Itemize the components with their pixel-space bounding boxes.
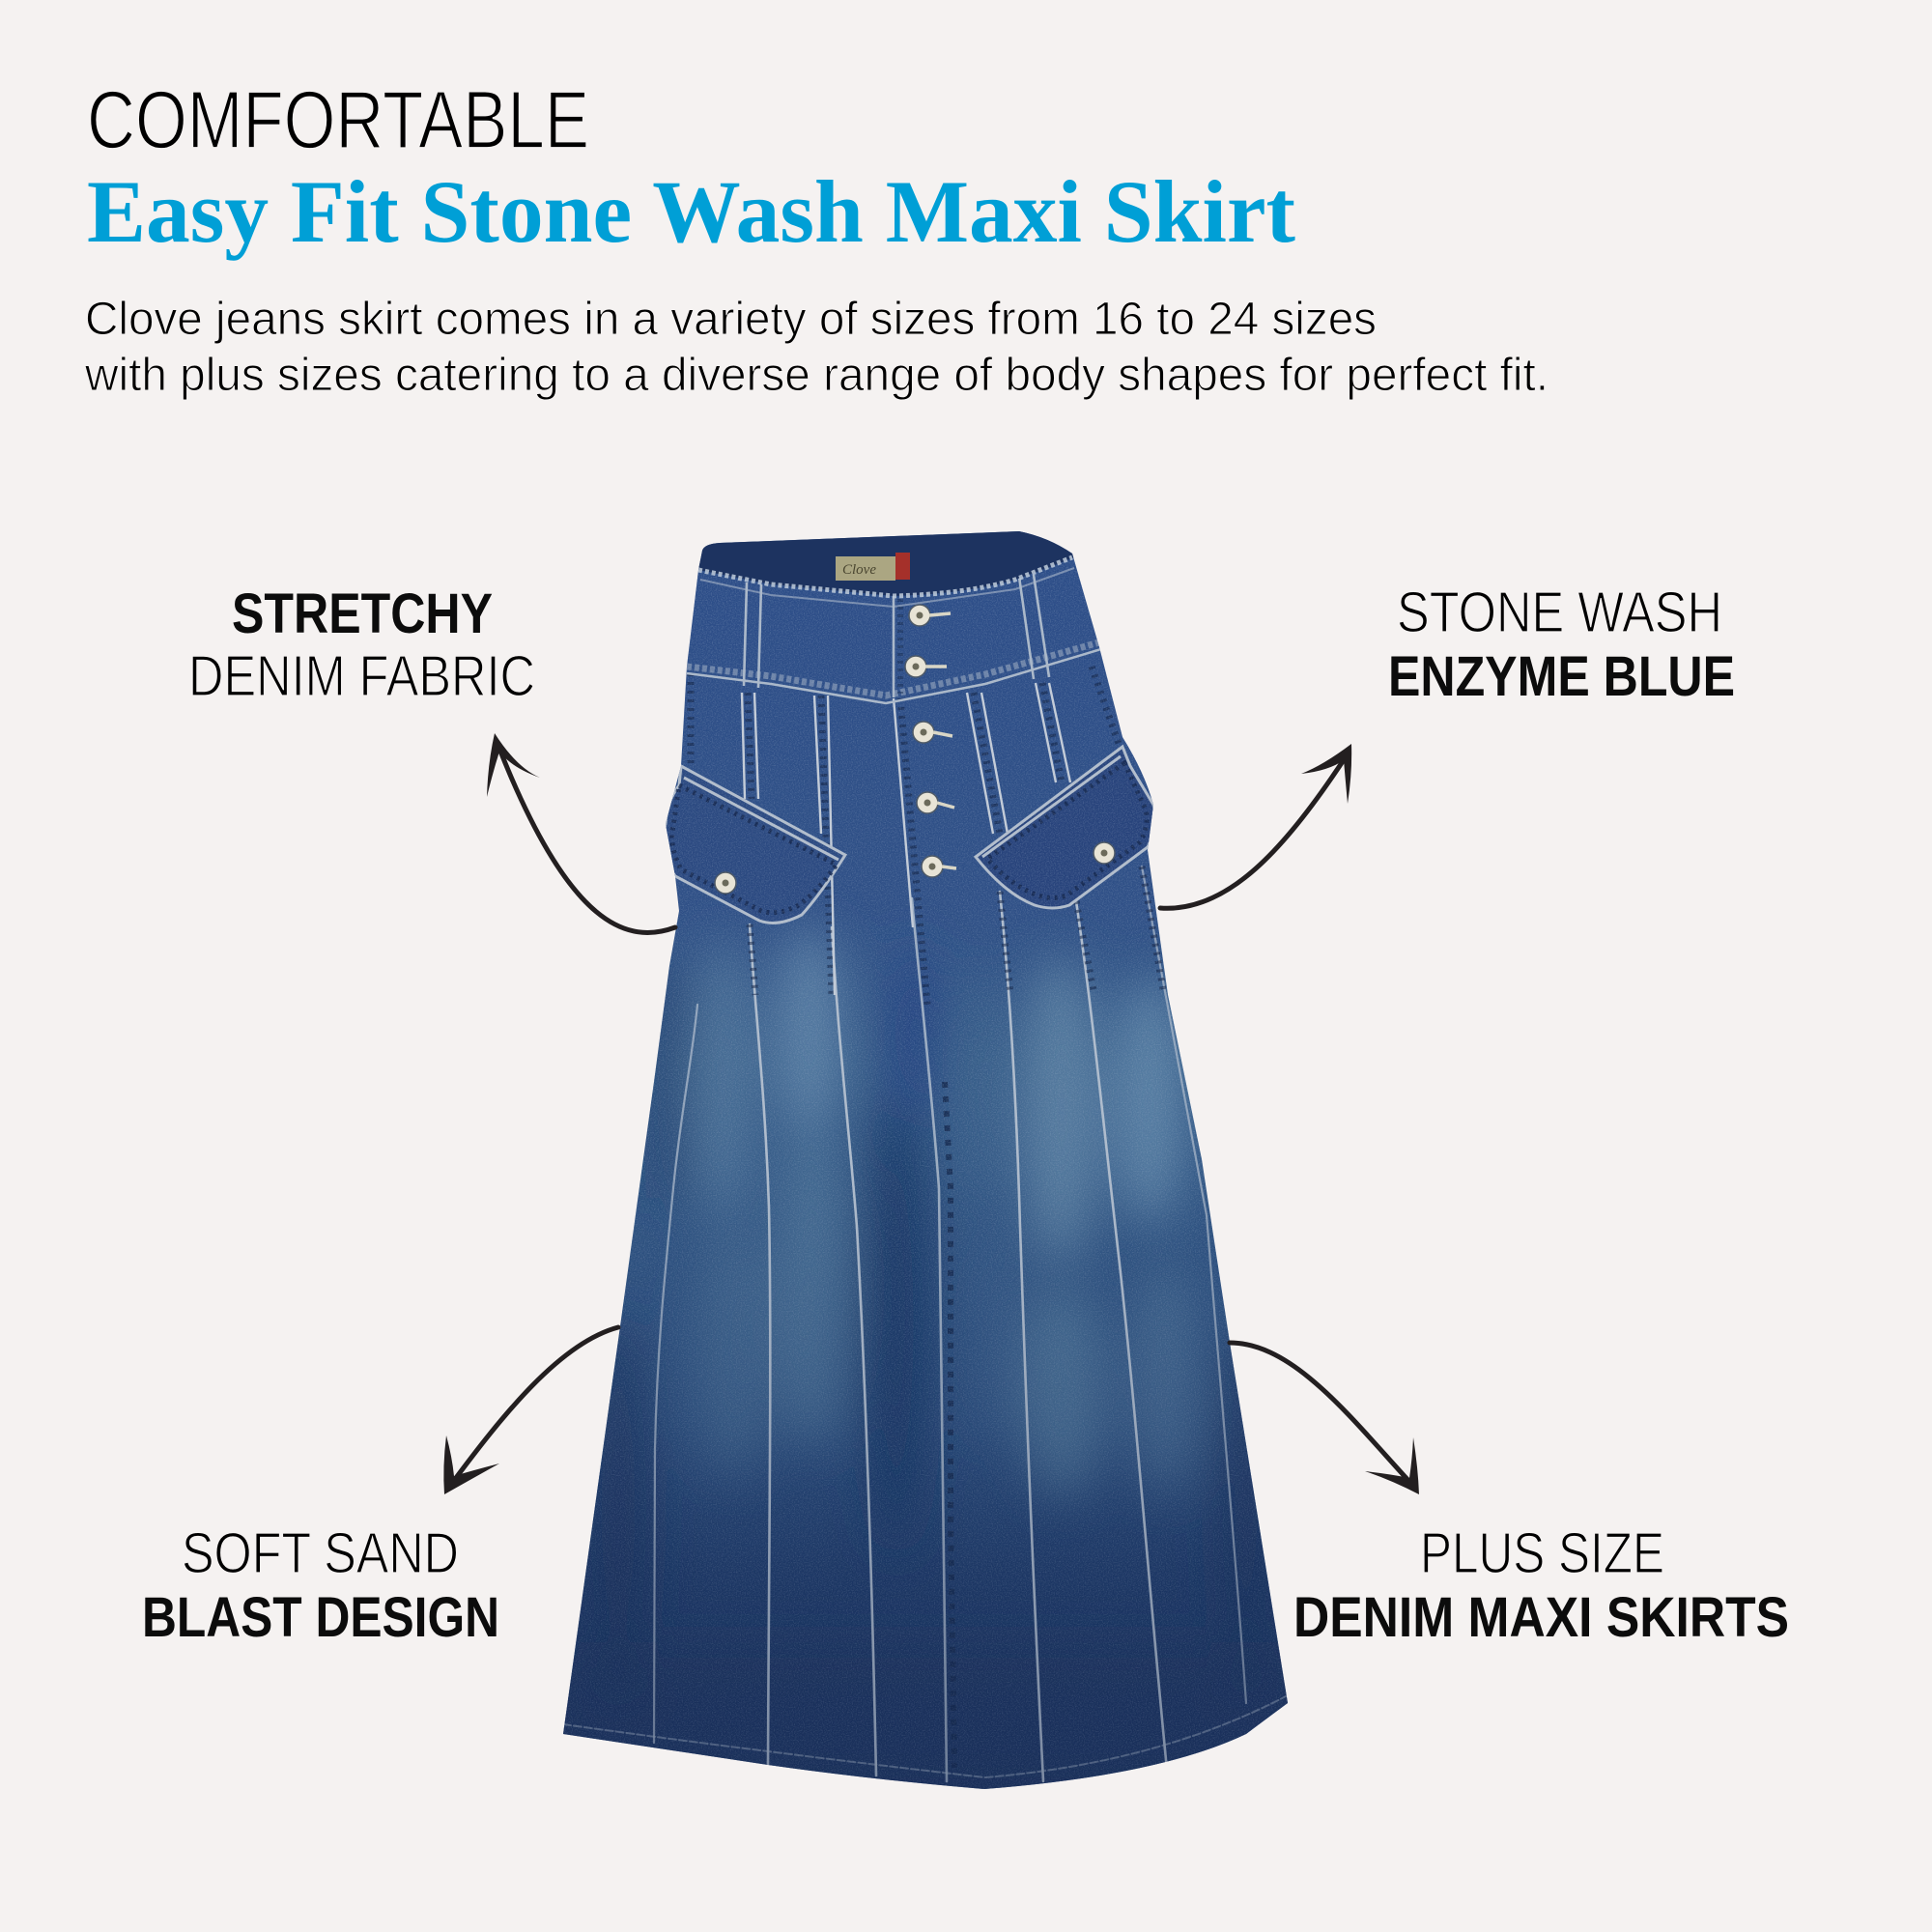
description text — [84, 294, 1548, 401]
label: plus size denim maxi skirts: PLUS SIZE — [1420, 1521, 1664, 1585]
label: stone wash enzyme blue: ENZYME BLUE — [1388, 645, 1735, 708]
seams lower — [563, 867, 1288, 1781]
description text: with plus sizes catering to a diverse range of body shapes for perfect fit. — [84, 350, 1548, 401]
arrow: to soft sand blast design — [443, 1327, 618, 1494]
title line: product name: Easy Fit Stone Wash Maxi Skirt — [87, 162, 1295, 261]
belt loop right — [1019, 575, 1049, 679]
description text: Clove jeans skirt comes in a variety of sizes from 16 to 24 sizes — [85, 294, 1377, 345]
title line: comfortable: COMFORTABLE — [87, 74, 589, 165]
inner waistband — [698, 526, 1082, 596]
arrow: to stone wash enzyme blue — [1160, 744, 1351, 908]
left pocket flap — [663, 766, 845, 923]
fabric texture and shading — [563, 558, 1288, 1789]
placket dark stitching — [945, 1082, 954, 1768]
skirt illustration — [541, 522, 1314, 1806]
arrow: to plus size denim maxi skirts — [1230, 1343, 1419, 1494]
arrow: to stretchy denim fabric — [487, 733, 675, 932]
label: stretchy denim fabric: DENIM FABRIC — [188, 644, 535, 708]
brand label: Clove — [842, 562, 876, 578]
label: plus size denim maxi skirts: DENIM MAXI SKIRTS — [1293, 1586, 1789, 1649]
label: soft sand blast design: SOFT SAND — [182, 1521, 459, 1585]
label: stretchy denim fabric: STRETCHY — [232, 582, 493, 645]
label: plus size denim maxi skirts — [1293, 1521, 1789, 1649]
right pocket flap — [976, 747, 1155, 908]
title block — [87, 74, 1295, 261]
seams upper dotted — [691, 667, 1164, 1005]
label: stone wash enzyme blue — [1388, 581, 1735, 708]
buttons — [715, 605, 1115, 894]
brand label — [836, 553, 910, 581]
waistband stitching — [687, 568, 1101, 703]
label: stone wash enzyme blue: STONE WASH — [1397, 581, 1722, 644]
placket top — [893, 596, 895, 697]
belt loop left — [744, 582, 761, 688]
label: soft sand blast design — [142, 1521, 499, 1649]
skirt body — [541, 522, 1314, 1806]
label: stretchy denim fabric — [188, 582, 535, 708]
label: soft sand blast design: BLAST DESIGN — [142, 1586, 499, 1649]
